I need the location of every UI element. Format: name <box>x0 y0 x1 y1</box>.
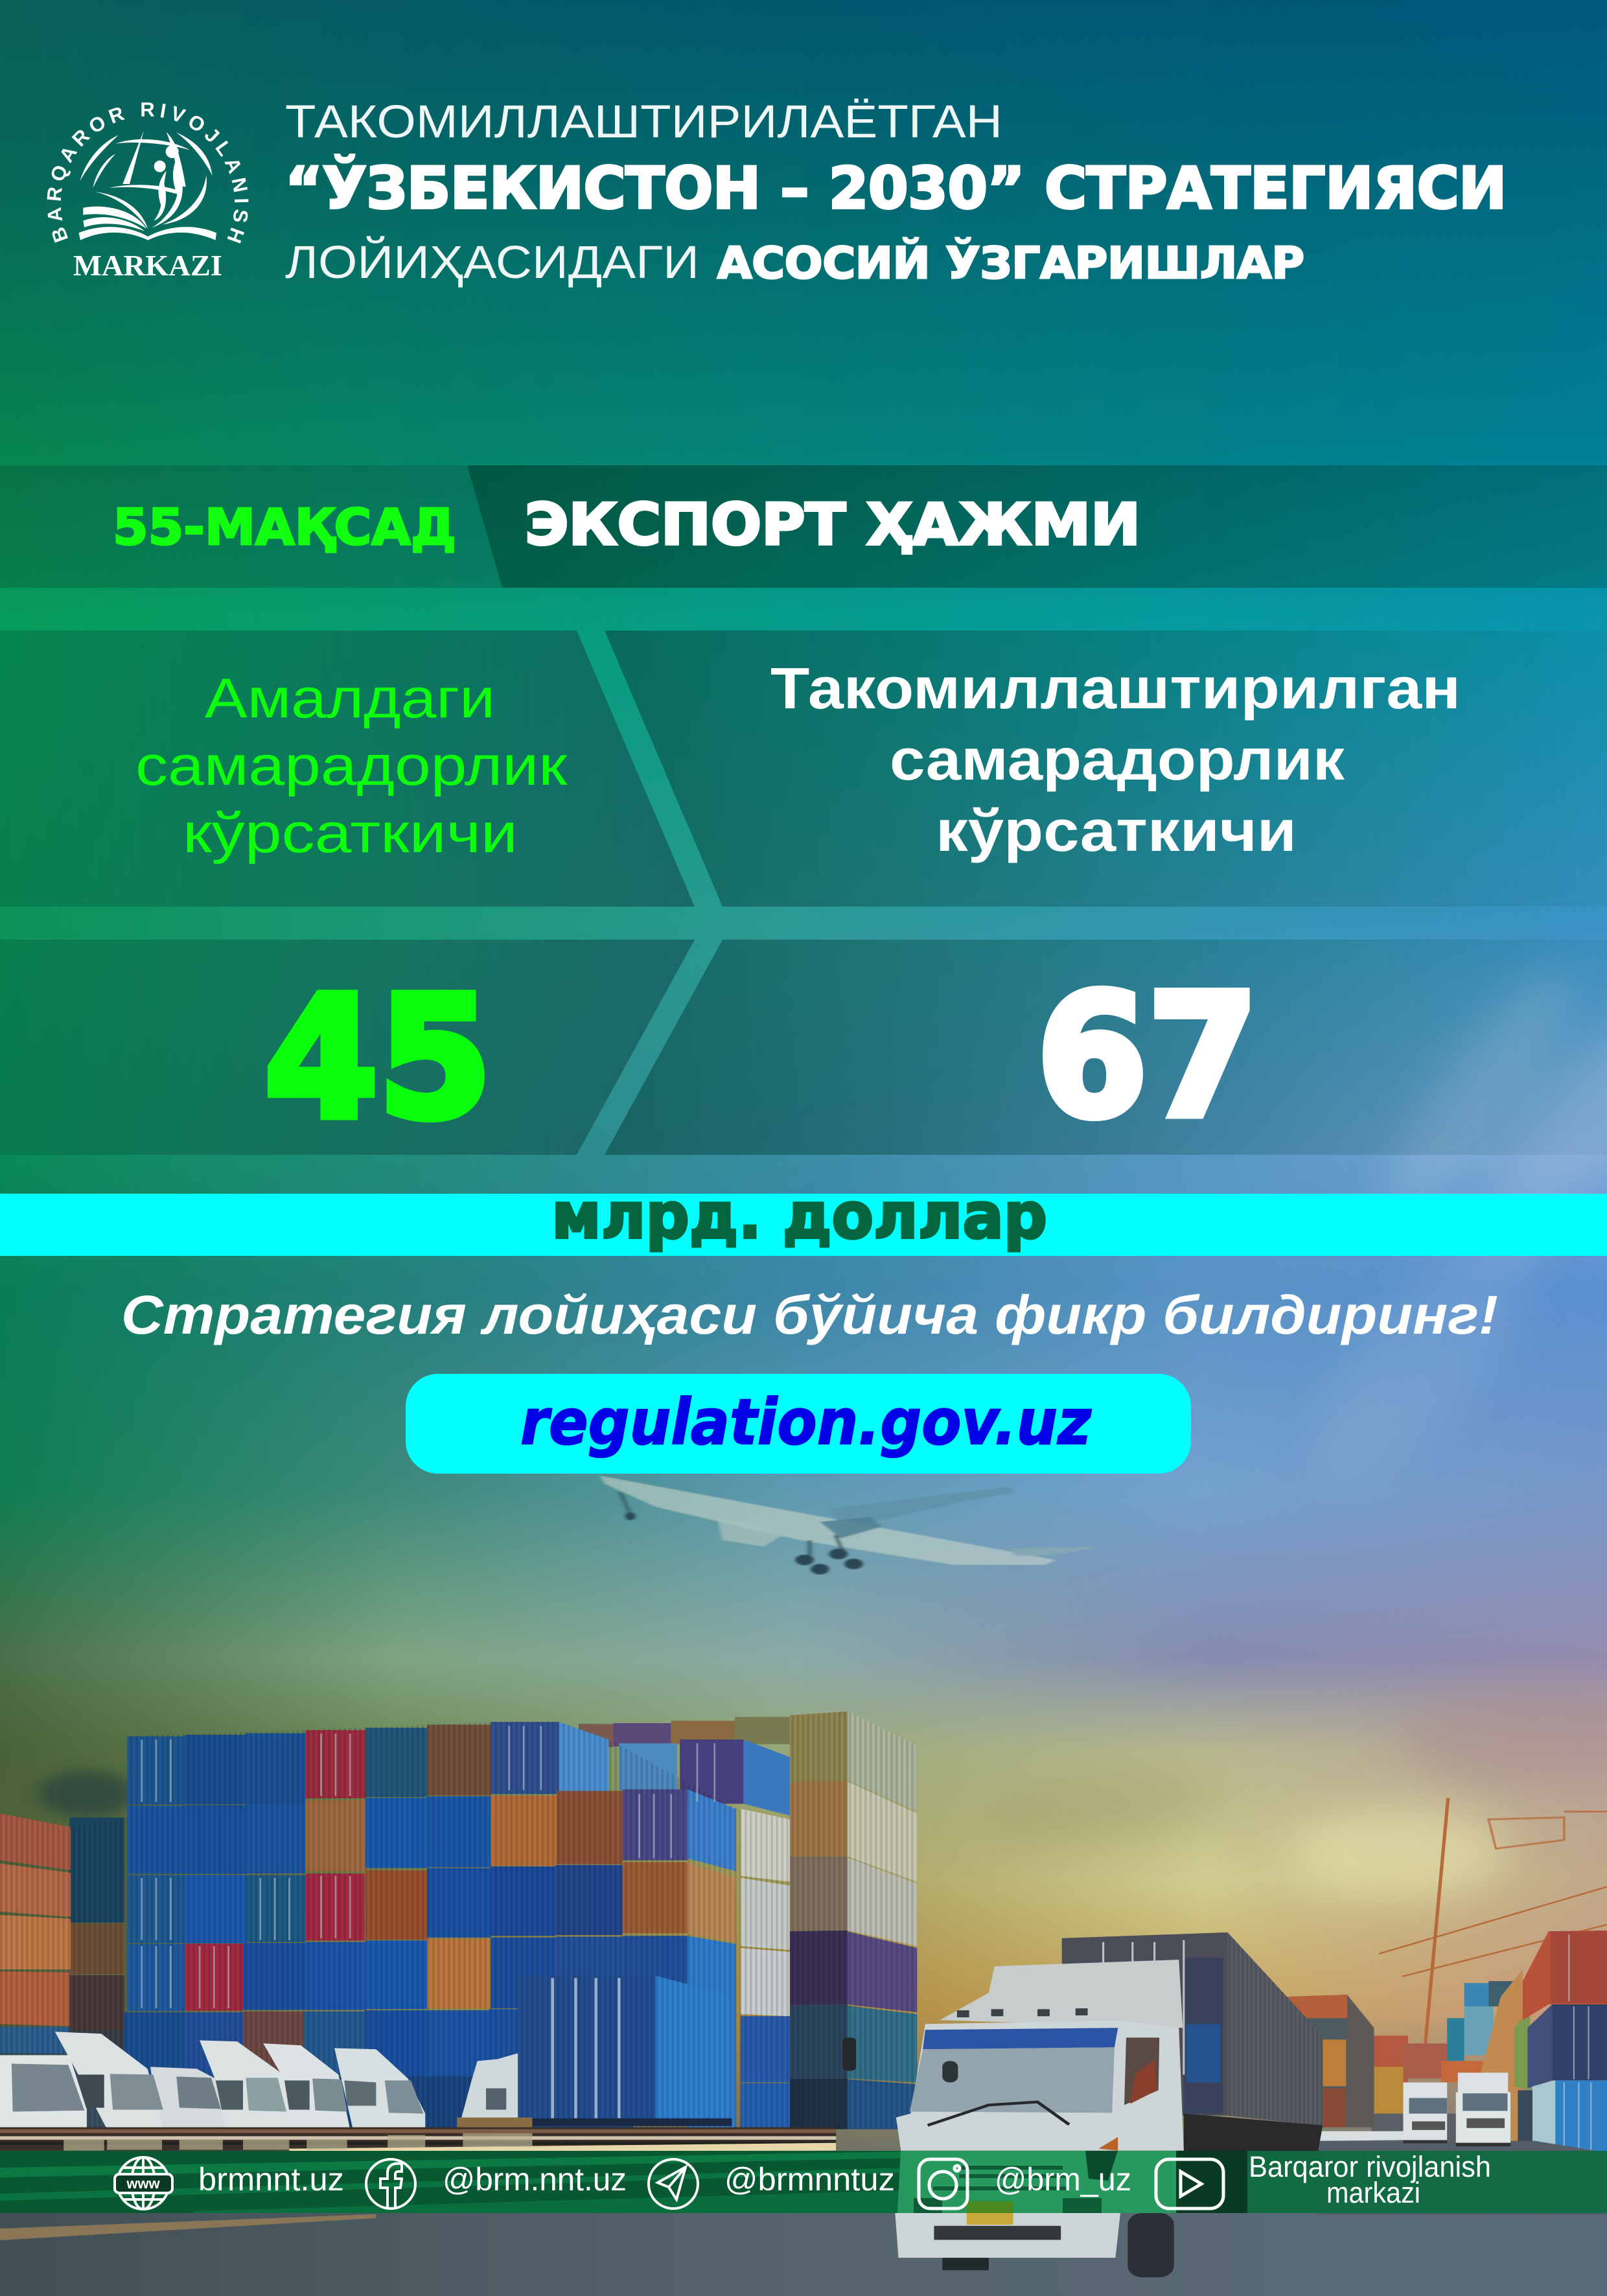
logo: markazi: MARKAZI <box>73 249 222 282</box>
call to action: Стратегия лойиҳаси бўйича фикр билдиринг! <box>121 1284 1498 1345</box>
title line 3: ЛОЙИҲАСИДАГИ <box>285 237 699 288</box>
goal title: ЭКСПОРТ ҲАЖМИ <box>525 491 1140 558</box>
truck cab <box>842 1960 1184 2151</box>
goal number: 55-МАҚСАД <box>113 499 456 557</box>
panel: current value <box>0 940 695 1155</box>
value: 45: 45 <box>264 961 492 1155</box>
back rows <box>579 1717 792 1747</box>
light streaks above footer <box>0 2128 836 2240</box>
row of white trucks <box>0 2032 532 2129</box>
brown stack <box>1286 1995 1374 2128</box>
header dark band <box>0 465 1607 588</box>
trailer container <box>1062 1932 1323 2164</box>
organization name <box>1249 2150 1491 2209</box>
title line 3 <box>285 237 1304 288</box>
inner right stack <box>619 1739 790 2129</box>
right containers <box>1481 1931 1607 2159</box>
footer band background <box>0 2151 1607 2213</box>
icon: globe: www <box>126 2175 161 2192</box>
panel: current indicator heading <box>0 631 695 907</box>
unit label: млрд. доллар <box>551 1179 1047 1253</box>
clouds <box>969 951 1607 1899</box>
left stack <box>0 1813 124 2129</box>
improved indicator label: самарадорлик <box>890 728 1345 793</box>
icon: globe <box>115 2157 172 2209</box>
icon: instagram <box>919 2159 967 2209</box>
corrugation <box>0 1711 917 2129</box>
current indicator label: Амалдаги <box>205 667 495 730</box>
value: 67: 67 <box>1037 959 1258 1155</box>
dark cloud behind stacks <box>38 1770 136 1817</box>
improved indicator label: Такомиллаштирилган <box>770 656 1461 721</box>
instagram handle: @brm_uz <box>995 2161 1131 2197</box>
telegram handle: @brmnntuz <box>724 2161 895 2197</box>
ground <box>0 2207 1607 2296</box>
facebook handle: @brm.nnt.uz <box>443 2161 627 2197</box>
far trucks <box>1403 2072 1510 2146</box>
current indicator label <box>135 667 568 864</box>
url pill <box>406 1374 1191 1474</box>
current indicator label: кўрсаткичи <box>183 802 518 864</box>
website: brmnnt.uz <box>198 2161 344 2197</box>
panel: improved indicator heading <box>605 631 1607 907</box>
panel: improved value <box>605 940 1607 1155</box>
icon: youtube <box>1156 2159 1223 2209</box>
improved indicator label <box>770 656 1461 864</box>
title line 3: АСОСИЙ ЎЗГАРИШЛАР <box>717 237 1304 288</box>
improved indicator label: кўрсаткичи <box>936 799 1297 864</box>
far road <box>1318 2131 1403 2141</box>
scene: large truck and right port <box>842 1798 1607 2277</box>
distant containers <box>1372 1981 1513 2141</box>
footer social row <box>115 2150 1491 2209</box>
url text: regulation.gov.uz <box>520 1386 1091 1459</box>
logo <box>47 102 249 282</box>
current indicator label: самарадорлик <box>135 735 568 797</box>
icon: telegram <box>649 2159 698 2209</box>
big blue container <box>518 1975 732 2126</box>
organization name: markazi <box>1326 2176 1420 2209</box>
door markings <box>142 1726 715 2008</box>
logo: globe, figures and open book <box>79 130 216 240</box>
truck lower front <box>895 2213 1174 2277</box>
title line 1: ТАКОМИЛЛАШТИРИЛАЁТГАН <box>285 97 1002 148</box>
far stack right <box>790 1711 917 2129</box>
organization name: Barqaror rivojlanish <box>1249 2150 1491 2183</box>
logo: circular text: BARQAROR RIVOJLANISH <box>47 102 249 244</box>
unit bar <box>0 1179 1607 1256</box>
icon: facebook <box>366 2159 415 2209</box>
crane <box>1379 1798 1607 2045</box>
airplane <box>599 1476 1102 1575</box>
title line 2: “ЎЗБЕКИСТОН – 2030” СТРАТЕГИЯСИ <box>285 155 1507 222</box>
scene: container stacks and small trucks <box>0 1711 917 2129</box>
main container wall <box>124 1722 736 2129</box>
